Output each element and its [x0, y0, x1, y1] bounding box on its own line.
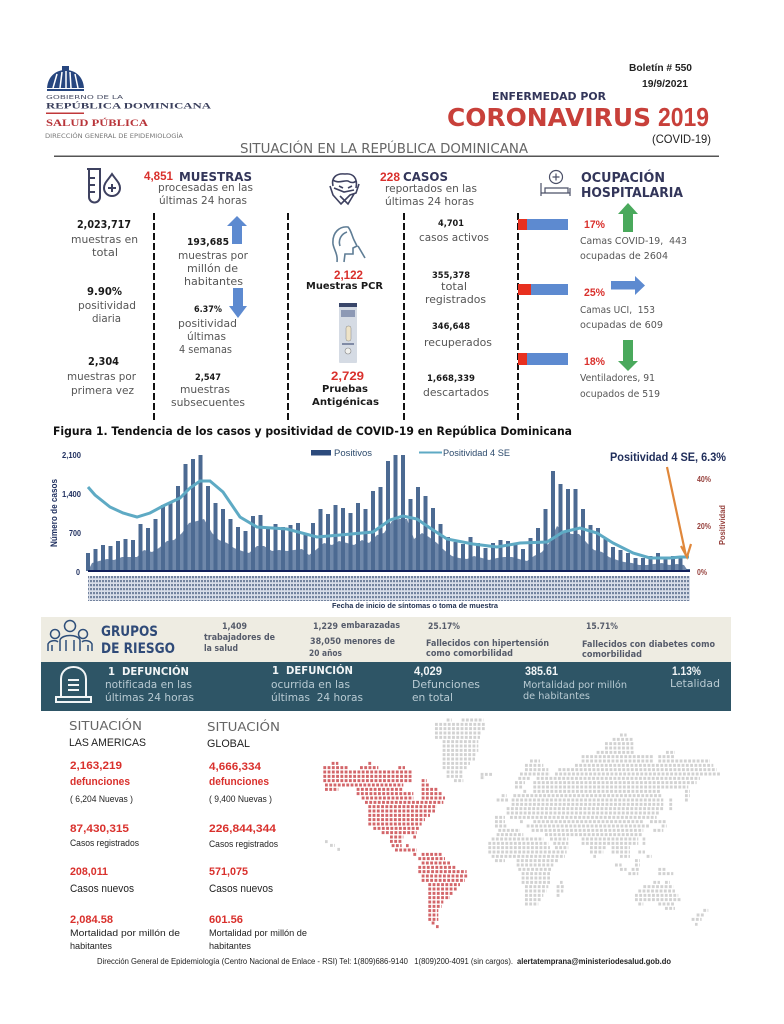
logo: Gobierno de la República Dominicana, Salud Pública: REPÚBLICA DOMINICANA — [46, 100, 212, 110]
stat: pruebas antigénicas: Antigénicas — [312, 396, 379, 408]
stat: recuperados: 346,648 — [432, 322, 470, 332]
stat: positividad 4 semanas — [178, 305, 237, 356]
footer contact line: alertatemprana@ministeriodesalud.gob.do — [517, 957, 671, 966]
title: CORONAVIRUS — [447, 103, 651, 132]
stat: mortalidad: Mortalidad por millón de — [209, 928, 307, 938]
icon: test tube and drop — [87, 169, 120, 203]
y axis labels: casos — [62, 451, 82, 577]
arrow: green down — [618, 340, 638, 371]
dotted world map — [323, 720, 720, 927]
stat: muestras PCR: 2,122 — [334, 268, 363, 282]
arrow: blue right — [611, 276, 645, 295]
heading: muestras: procesadas en las — [158, 181, 253, 194]
figure title: Figura 1. Tendencia de los casos y positividad de COVID-19 en República Dominicana — [53, 424, 572, 438]
icon: face with mask — [330, 174, 359, 204]
panel: muestras — [67, 169, 253, 409]
stat: menores de 20 años: 20 años — [309, 649, 342, 659]
stat: positividad diaria: positividad — [78, 299, 136, 312]
stat: diabetes: Fallecidos con diabetes como — [582, 640, 715, 650]
stat: camas COVID-19: 17% — [584, 219, 605, 231]
heading: casos — [380, 170, 477, 208]
stat: mortalidad — [70, 914, 180, 951]
panel: defunciones — [41, 662, 731, 711]
stat: descartados: descartados — [423, 386, 489, 399]
stat: casos registrados: Casos registrados — [70, 838, 139, 848]
bulletin number and date: 19/9/2021 — [642, 79, 688, 90]
arrow: orange callout — [667, 467, 691, 557]
panel: situación las américas — [69, 718, 180, 951]
bulletin number and date: Boletín # 550 — [629, 63, 692, 74]
stat: total registrados — [425, 271, 486, 306]
callout: positividad 4 SE, 6.3%: Positividad 4 SE, 6.3% — [610, 450, 726, 464]
stat: recuperados — [424, 322, 492, 349]
map: rest of the world in grey — [325, 720, 720, 924]
stat: ventiladores: 18% — [584, 356, 605, 368]
bars: positivos — [88, 455, 688, 571]
stat: descartados: 1,668,339 — [427, 374, 475, 384]
heading: ocupación hospitalaria: OCUPACIÓN — [581, 170, 665, 186]
title: ENFERMEDAD POR — [492, 90, 607, 103]
stat: casos nuevos — [70, 866, 134, 895]
stat: mortalidad — [209, 914, 307, 951]
heading: ocupación hospitalaria — [581, 170, 683, 201]
map: Americas in red — [323, 763, 468, 927]
stat: casos activos — [419, 219, 489, 244]
heading: casos: últimas 24 horas — [385, 195, 474, 208]
stat: muestras en total: total — [92, 246, 118, 259]
heading: muestras — [144, 169, 253, 207]
stat: muestras subsecuentes: muestras — [180, 383, 230, 396]
stat: defunción ocurrida: últimas 24 horas — [271, 691, 363, 704]
stat: positividad 4 semanas: 6.37% — [194, 305, 222, 315]
stat: trabajadores de la salud: 1,409 — [222, 622, 247, 632]
stat: mortalidad por millón: de habitantes — [523, 691, 590, 702]
stat: mortalidad por millón — [523, 664, 627, 702]
stat: embarazadas — [313, 621, 400, 632]
panel: pruebas — [306, 174, 383, 408]
stat: letalidad: 1.13% — [672, 664, 701, 678]
y axis title: número de casos: Número de casos — [49, 479, 59, 547]
stat: defunciones en total: Defunciones — [412, 678, 480, 691]
heading: SITUACIÓN — [207, 719, 280, 734]
bar: ventiladores 18% — [518, 353, 568, 365]
stat: muestras en total: 2,023,717 — [77, 218, 131, 231]
stat: defunciones en total — [412, 664, 480, 704]
stat: ventiladores — [580, 356, 660, 400]
y axis title: positividad: Positividad — [718, 505, 727, 545]
stat: hipertensión: como comorbilidad — [426, 649, 513, 659]
heading: casos: 228 — [380, 170, 400, 184]
panel: situación global — [207, 719, 307, 951]
stat: hipertensión: 25.17% — [428, 622, 460, 632]
stat: ventiladores: Ventiladores, 91 — [580, 373, 655, 384]
y axis labels: positividad — [697, 475, 711, 577]
stat: pruebas antigénicas — [312, 369, 379, 408]
y axis labels: casos: 2,100 — [62, 451, 82, 460]
y axis labels: casos: 700 — [69, 529, 81, 538]
footer contact line: Dirección General de Epidemiología (Centro Nacional de Enlace - RSI) Tel: 1(809)686-9140 1(809)200-4091 (sin cargos). — [97, 957, 513, 966]
bar: camas COVID-19 17% — [518, 219, 568, 230]
stat: defunción notificada: últimas 24 horas — [105, 691, 194, 704]
stat: diabetes — [582, 622, 715, 660]
stat: mortalidad por millón: Mortalidad por millón — [523, 679, 627, 691]
stat: defunciones: 2,163,219 — [70, 760, 122, 772]
title: (COVID-19) — [652, 132, 711, 146]
stat: hipertensión — [426, 622, 549, 659]
stat: muestras subsecuentes: subsecuentes — [171, 396, 245, 409]
stat: total registrados: 355,378 — [432, 271, 470, 281]
stat: muestras en total — [71, 218, 138, 259]
stat: casos nuevos: 208,011 — [70, 866, 108, 878]
stat: muestras por primera vez: muestras por — [67, 370, 136, 383]
heading: casos: reportados en las — [385, 182, 477, 195]
stat: casos nuevos — [209, 866, 273, 895]
stat: muestras subsecuentes: 2,547 — [195, 373, 221, 383]
stat: muestras PCR: Muestras PCR — [306, 281, 383, 292]
stat: defunciones — [209, 761, 272, 804]
y axis labels: positividad: 20% — [697, 522, 711, 531]
stat: defunciones: ( 6,204 Nuevas ) — [70, 794, 133, 804]
arrow: up — [227, 216, 247, 244]
icon: hospital bed — [541, 170, 570, 196]
stat: defunción ocurrida: ocurrida en las — [271, 678, 350, 691]
stat: muestras por millón: millón de — [187, 262, 238, 275]
logo: Gobierno de la República Dominicana, Salud Pública: DIRECCIÓN GENERAL DE EPIDEMIOLOGÍA — [45, 133, 184, 140]
stat: defunciones en total: en total — [412, 691, 453, 704]
title: 2019 — [658, 102, 709, 132]
stat: casos registrados: 226,844,344 — [209, 823, 277, 835]
stat: positividad diaria — [78, 285, 136, 325]
stat: casos nuevos: Casos nuevos — [209, 883, 273, 895]
heading: muestras: 4,851 — [144, 169, 173, 183]
stat: positividad 4 semanas: positividad — [178, 317, 237, 330]
arrow: down — [229, 288, 247, 318]
stat: muestras por primera vez: primera vez — [71, 384, 134, 397]
stat: defunción notificada: notificada en las — [105, 678, 192, 691]
title — [447, 90, 711, 146]
legend — [311, 448, 510, 458]
stat: hipertensión: Fallecidos con hipertensión — [426, 638, 549, 649]
stat: trabajadores de la salud: la salud — [204, 644, 238, 654]
y axis labels: casos: 1,400 — [62, 490, 82, 499]
heading: grupos de riesgo: GRUPOS — [101, 624, 158, 640]
stat: casos registrados — [209, 823, 278, 849]
heading: ocupación hospitalaria: HOSPITALARIA — [581, 186, 683, 201]
stat: diabetes: 15.71% — [586, 622, 618, 632]
stat: menores de 20 años — [309, 637, 395, 659]
stat: camas UCI: 25% — [584, 287, 605, 299]
stat: casos registrados — [70, 823, 139, 848]
stat: casos nuevos: Casos nuevos — [70, 883, 134, 895]
icon: group of people — [48, 620, 92, 651]
heading: grupos de riesgo — [101, 624, 175, 657]
stat: casos registrados: 87,430,315 — [70, 823, 129, 835]
y axis labels: positividad: 0% — [697, 568, 707, 577]
stat: muestras por millón: 193,685 — [187, 237, 229, 248]
heading: muestras: MUESTRAS — [179, 170, 252, 184]
stat: casos nuevos: 571,075 — [209, 866, 248, 878]
stat: mortalidad: Mortalidad por millón de — [70, 928, 180, 938]
heading: muestras: últimas 24 horas — [159, 194, 247, 207]
stat: muestras por primera vez: 2,304 — [88, 355, 119, 368]
stat: mortalidad: habitantes — [209, 941, 251, 951]
icon: dome — [47, 66, 84, 91]
logo: Gobierno de la República Dominicana, Salud Pública: SALUD PÚBLICA — [46, 117, 148, 129]
x axis baseline — [88, 570, 690, 572]
stat: menores de 20 años: 38,050 — [310, 637, 341, 647]
stat: camas UCI: Camas UCI, 153 — [580, 305, 655, 316]
panel: grupos de riesgo — [41, 617, 731, 662]
heading — [69, 718, 146, 749]
panel: ocupación hospitalaria — [518, 170, 687, 400]
stat: pruebas antigénicas: Pruebas — [322, 384, 368, 395]
stat: positividad diaria: diaria — [92, 312, 121, 325]
heading: LAS AMERICAS — [69, 737, 146, 749]
chart: tendencia de casos y positividad — [49, 448, 727, 610]
y axis labels: casos: 0 — [76, 568, 80, 577]
stat: mortalidad: 601.56 — [209, 914, 243, 926]
dashed column dividers — [154, 213, 518, 420]
stat: positividad diaria: 9.90% — [87, 285, 122, 298]
stat: defunción notificada: 1 DEFUNCIÓN — [108, 665, 189, 678]
stat: defunción ocurrida: 1 DEFUNCIÓN — [272, 664, 353, 677]
stat: positividad 4 semanas: últimas — [187, 330, 226, 343]
stat: diabetes: comorbilidad — [582, 650, 642, 660]
logo: Gobierno de la República Dominicana, Salud Pública — [45, 66, 212, 140]
stat: descartados — [423, 374, 489, 399]
stat: casos registrados: Casos registrados — [209, 839, 278, 849]
bar: camas UCI 25% — [518, 284, 568, 295]
stat: ventiladores: ocupados de 519 — [580, 389, 660, 400]
stat: trabajadores de la salud: trabajadores de — [204, 633, 275, 643]
stat: defunción ocurrida — [271, 664, 363, 704]
stat: letalidad: Letalidad — [670, 677, 720, 690]
stat: defunciones en total: 4,029 — [414, 664, 442, 678]
arrow: green up — [618, 203, 638, 232]
stat: mortalidad: habitantes — [70, 941, 112, 951]
heading: grupos de riesgo: DE RIESGO — [101, 641, 175, 657]
stat: muestras por millón: muestras por — [178, 249, 248, 262]
stat: embarazadas: embarazadas — [341, 621, 400, 631]
y axis labels: positividad: 40% — [697, 475, 711, 484]
stat: casos activos: 4,701 — [438, 219, 464, 229]
heading: SITUACIÓN — [69, 718, 142, 733]
legend: Positividad 4 SE — [443, 448, 510, 458]
stat: defunciones: defunciones — [209, 776, 269, 788]
stat: defunción notificada — [105, 665, 194, 704]
stat: defunciones: 4,666,334 — [209, 761, 262, 773]
stat: muestras por millón — [178, 237, 248, 288]
date tick labels band — [88, 576, 690, 601]
stat: camas UCI: ocupadas de 609 — [580, 320, 663, 331]
subtitle: SITUACIÓN EN LA REPÚBLICA DOMINICANA — [240, 141, 528, 157]
bulletin number and date — [629, 63, 692, 90]
stat: camas UCI — [580, 287, 663, 331]
line: positividad 4 SE — [88, 481, 689, 558]
stat: camas COVID-19 — [580, 219, 687, 262]
stat: pruebas antigénicas: 2,729 — [331, 369, 364, 383]
stat: mortalidad por millón: 385.61 — [525, 664, 558, 678]
stat: camas COVID-19: ocupadas de 2604 — [580, 251, 668, 262]
heading: GLOBAL — [207, 738, 250, 750]
stat: muestras por primera vez — [67, 355, 136, 397]
heading: casos: CASOS — [403, 170, 448, 184]
icon: tombstone — [56, 667, 91, 702]
stat: positividad 4 semanas: 4 semanas — [179, 343, 232, 356]
stat: trabajadores de la salud — [204, 622, 275, 654]
stat: recuperados: recuperados — [424, 336, 492, 349]
stat: menores de 20 años: menores de — [344, 637, 395, 647]
logo: Gobierno de la República Dominicana, Salud Pública: GOBIERNO DE LA — [46, 95, 123, 101]
stat: defunciones — [70, 760, 133, 804]
stat: defunciones: ( 9,400 Nuevas ) — [209, 794, 272, 804]
stat: letalidad — [670, 664, 720, 690]
icon: nasal swab — [333, 227, 365, 262]
panel: casos — [380, 170, 492, 399]
icon: antigen test device — [339, 303, 357, 363]
stat: total registrados: registrados — [425, 293, 486, 306]
stat: total registrados: total — [441, 280, 467, 293]
stat: muestras PCR — [306, 268, 383, 292]
stat: camas COVID-19: Camas COVID-19, 443 — [580, 236, 687, 247]
stat: mortalidad: 2,084.58 — [70, 914, 113, 926]
legend: Positivos — [334, 448, 373, 458]
heading — [207, 719, 280, 750]
stat: defunciones: defunciones — [70, 776, 130, 788]
stat: casos activos: casos activos — [419, 231, 489, 244]
x axis title: Fecha de inicio de síntomas o toma de muestra — [332, 601, 499, 610]
stat: muestras subsecuentes — [171, 373, 245, 409]
stat: muestras en total: muestras en — [71, 233, 138, 246]
stat: embarazadas: 1,229 — [313, 622, 338, 632]
stat: muestras por millón: habitantes — [184, 275, 243, 288]
